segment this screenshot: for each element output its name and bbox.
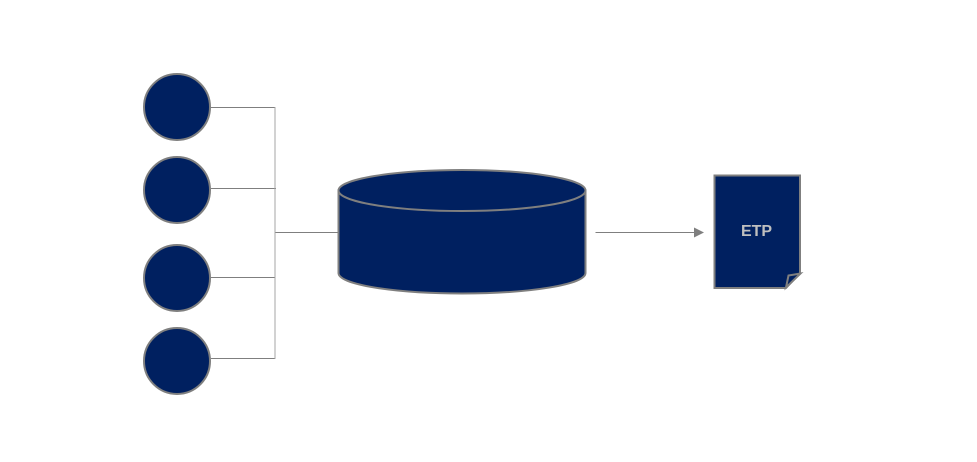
source circle 2 (144, 157, 210, 223)
database cylinder (338, 170, 586, 294)
source circle 4 (144, 328, 210, 394)
arrow to document (596, 228, 704, 238)
connector lines: sources to bus to cylinder (211, 107, 338, 359)
source circle 3 (144, 245, 210, 311)
ETP label: ETP (741, 223, 772, 240)
ETP document (714, 176, 800, 288)
page curl (786, 274, 800, 288)
source circle 1 (144, 74, 210, 140)
